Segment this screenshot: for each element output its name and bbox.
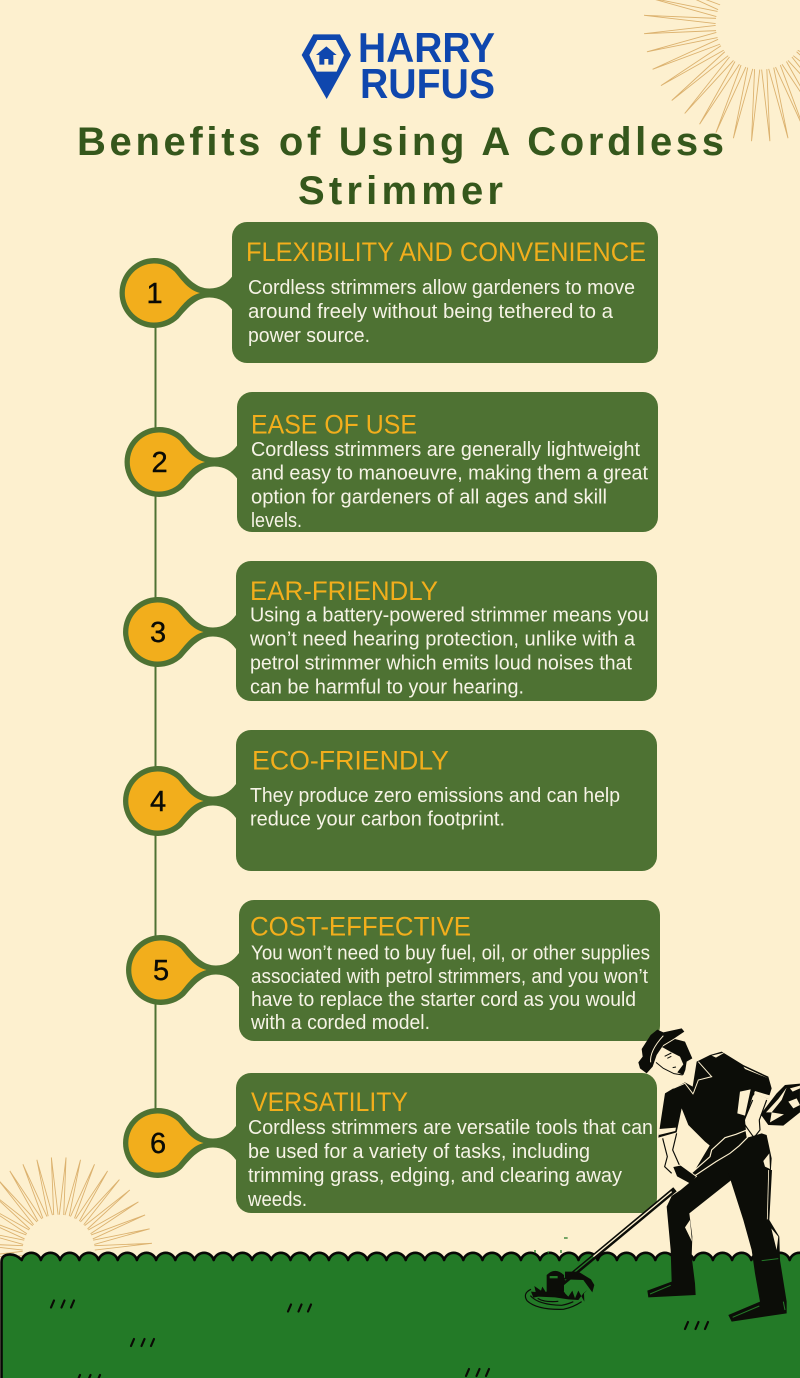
hair (662, 1039, 692, 1075)
title (77, 120, 724, 213)
number marker 3 (123, 597, 236, 667)
heading: COST-EFFECTIVE (250, 912, 471, 942)
number marker 6: 6 (150, 1128, 166, 1160)
card background (237, 392, 658, 532)
rear leg and boot (647, 1174, 731, 1297)
body text (248, 277, 635, 347)
number marker 1: 1 (146, 278, 163, 310)
number marker 3: 3 (150, 617, 166, 649)
number marker 5: 5 (153, 955, 169, 987)
body text: reduce your carbon footprint. (250, 808, 505, 830)
heading: ECO-FRIENDLY (252, 746, 449, 776)
panel: flexibility and convenience (120, 222, 658, 363)
logo wordmark: RUFUS (360, 60, 495, 107)
body text (250, 785, 620, 830)
body text: You won’t need to buy fuel, oil, or other supplies (251, 942, 650, 964)
battery pack (761, 1084, 800, 1126)
trouser top (690, 1133, 772, 1178)
logo wordmark (358, 24, 495, 107)
body text (249, 604, 649, 698)
legs (647, 1170, 787, 1322)
near forearm (663, 1133, 679, 1173)
timeline line (154, 320, 156, 1115)
front leg and boot (727, 1170, 787, 1322)
body text: Cordless strimmers are generally lightweight (251, 439, 640, 461)
motor housing (690, 1130, 747, 1176)
icon: house location pin (302, 34, 351, 99)
body text: won’t need hearing protection, unlike with a (249, 628, 636, 650)
panel: ease of use (125, 392, 658, 532)
hat (638, 1028, 684, 1073)
heading: VERSATILITY (251, 1087, 408, 1117)
body text: power source. (248, 325, 370, 347)
shaft (560, 1189, 675, 1285)
panel: eco-friendly (123, 730, 657, 871)
number marker 4 (123, 766, 236, 836)
panel: cost-effective (126, 900, 660, 1041)
sun rays: bottom left (0, 1157, 152, 1260)
number marker 6 (123, 1108, 236, 1178)
body text: around freely without being tethered to a (248, 301, 614, 323)
body text: option for gardeners of all ages and skill (251, 486, 607, 508)
panel: ear-friendly (123, 561, 657, 701)
face lines (656, 1053, 683, 1075)
heading: EAR-FRIENDLY (250, 576, 438, 606)
panel: versatility (123, 1073, 657, 1213)
grass specks (535, 1238, 568, 1253)
title: Benefits of Using A Cordless (77, 120, 724, 164)
boot and leg highlights (685, 1220, 778, 1250)
illustration: man using a cordless strimmer (525, 1028, 800, 1322)
strimmer shaft and cutter (525, 1189, 675, 1309)
body text: have to replace the starter cord as you would (251, 989, 636, 1011)
body text: trimming grass, edging, and clearing away (248, 1165, 622, 1187)
number marker 5 (126, 935, 239, 1005)
collar (673, 1062, 712, 1094)
body text: and easy to manoeuvre, making them a great (251, 462, 648, 484)
body text: be used for a variety of tasks, including (248, 1141, 590, 1163)
body text: Cordless strimmers are versatile tools that can (248, 1117, 653, 1139)
logo: Harry Rufus (302, 24, 495, 107)
title: Strimmer (298, 169, 503, 213)
handle (673, 1165, 697, 1184)
heading: FLEXIBILITY AND CONVENIENCE (246, 237, 646, 267)
body text: with a corded model. (250, 1012, 430, 1034)
body (638, 1028, 800, 1184)
number marker 4: 4 (150, 786, 166, 818)
card background (236, 1073, 657, 1213)
body text: They produce zero emissions and can help (250, 785, 620, 807)
card background (232, 222, 658, 363)
guard (565, 1272, 594, 1292)
body text (251, 439, 648, 532)
body text: can be harmful to your hearing. (250, 676, 524, 698)
body text: petrol strimmer which emits loud noises that (250, 652, 632, 674)
body text: associated with petrol strimmers, and you won’t (251, 966, 648, 988)
body text: Cordless strimmers allow gardeners to move (248, 277, 635, 299)
number marker 1 (120, 258, 232, 328)
body text: levels. (251, 510, 302, 532)
motor head (547, 1271, 564, 1292)
body text: weeds. (247, 1189, 307, 1211)
number marker 2 (125, 427, 238, 497)
jagged cut grass (531, 1286, 587, 1302)
body text: Using a battery-powered strimmer means you (250, 604, 649, 626)
logo wordmark: HARRY (358, 24, 495, 71)
card background (236, 730, 657, 871)
grass ground with scalloped edge (2, 1253, 800, 1378)
sun rays: top right (644, 0, 800, 141)
torso and sleeves (658, 1052, 772, 1148)
card background (236, 561, 657, 701)
heading: EASE OF USE (251, 410, 417, 440)
body text (250, 942, 650, 1034)
number marker 2: 2 (151, 447, 168, 479)
shirt highlights (659, 1052, 771, 1135)
card background (239, 900, 660, 1041)
body text (247, 1117, 653, 1211)
grass tick marks (51, 1300, 708, 1378)
far forearm and hand (743, 1100, 767, 1138)
ripples (525, 1289, 582, 1309)
